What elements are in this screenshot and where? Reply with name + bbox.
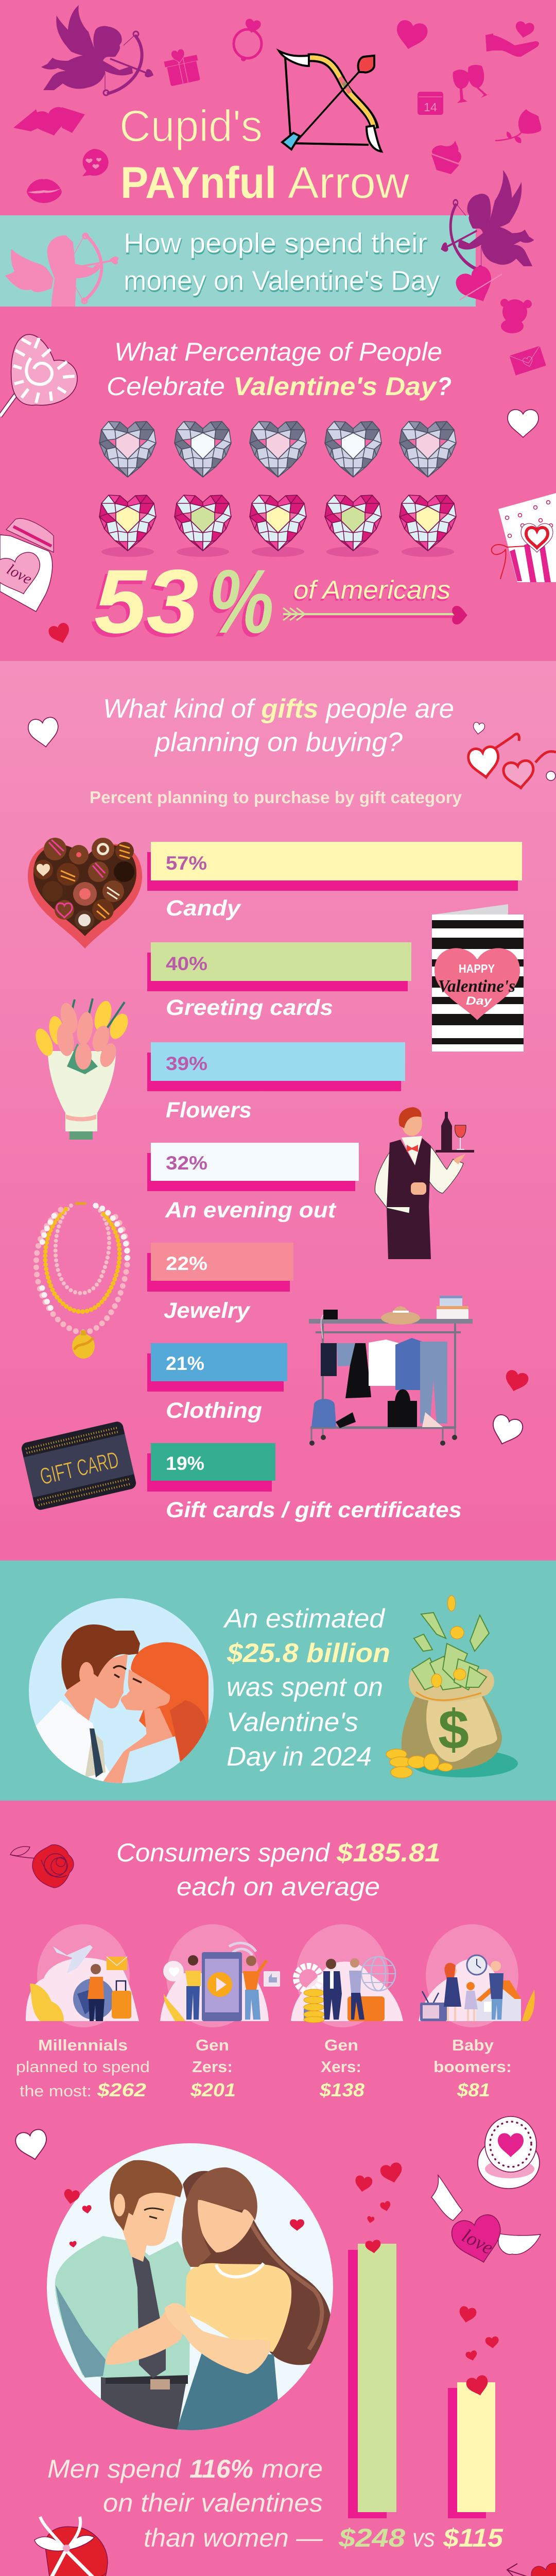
label: Gen Zers — [190, 2036, 236, 2100]
icon: hand holding heart — [485, 21, 539, 57]
icon: heart — [393, 19, 429, 53]
icon: red heart — [502, 1369, 530, 1394]
icon: chocolate box — [28, 838, 142, 948]
gem heart pictogram, 5 gray of 10 — [99, 421, 456, 477]
heading: ? — [437, 372, 451, 401]
title: PAYnful — [120, 158, 276, 208]
illustration: money bag: $ — [438, 1698, 469, 1760]
bar: women — [448, 2388, 486, 2518]
label: of Americans: of Americans — [293, 575, 450, 604]
bar: Jewelry: Jewelry — [164, 1298, 251, 1323]
arrow — [283, 606, 467, 624]
illustration: kissing couple — [29, 1598, 214, 1798]
item: baby boomers — [419, 1924, 535, 2100]
icon: clothes rack — [309, 1296, 473, 1446]
panel: gift categories — [21, 694, 556, 1522]
text: estimated spend — [223, 1604, 390, 1772]
bar: Gift cards: Gift cards / gift certificates — [166, 1498, 462, 1522]
subtitle: money on Valentine's Day — [124, 265, 440, 296]
icon: love jar — [0, 518, 54, 612]
icon: winged heart — [13, 105, 85, 140]
bar: Jewelry — [147, 1243, 293, 1323]
heading — [103, 694, 454, 757]
icon: cupcake — [431, 141, 461, 174]
text: men spend more: $248 — [338, 2523, 405, 2552]
item: gen zers — [160, 1924, 280, 2100]
icon: waiter — [375, 1107, 474, 1259]
icon: greeting card: Day — [466, 994, 493, 1007]
bar: men — [348, 2250, 387, 2518]
icon: tulip bouquet — [32, 998, 132, 1140]
icon: speech bubble with hearts — [82, 149, 109, 176]
heading: What kind of gifts people are — [103, 694, 454, 724]
icon: calendar — [418, 92, 443, 115]
text: estimated spend: Day in 2024 — [227, 1742, 372, 1772]
bar: Gift cards — [147, 1443, 462, 1522]
label: Baby boomers: boomers: — [433, 2058, 512, 2076]
title — [119, 101, 410, 208]
text: men spend more: 116% — [189, 2454, 253, 2483]
panel: average spend by generation — [10, 1838, 535, 2100]
heading: planning on buying? — [154, 727, 403, 757]
icon: ring — [234, 18, 262, 61]
icon: rose — [495, 109, 541, 143]
heading: Celebrate — [107, 372, 225, 401]
bar: Greeting cards — [147, 942, 411, 1020]
bar: Clothing: 21% — [166, 1353, 204, 1374]
icon: gift card: GIFT CARD — [38, 1446, 121, 1490]
bar: Greeting cards: Greeting cards — [166, 995, 333, 1020]
item: millennials — [16, 1924, 150, 2100]
text: men spend more: Men spend — [47, 2454, 182, 2483]
illustration: business people — [291, 1924, 403, 2027]
icon: white heart — [488, 1413, 525, 1449]
label: Gen Xers — [319, 2036, 364, 2100]
panel: percentage who celebrate — [0, 334, 556, 652]
text: estimated spend: $25.8 billion — [227, 1638, 390, 1668]
text: men spend more: vs — [412, 2523, 435, 2552]
icon: purple cupid right — [440, 170, 534, 272]
icon: gift with heart — [492, 493, 556, 582]
heading: each on average — [177, 1872, 380, 1901]
label: Gen Xers: Xers: — [321, 2058, 361, 2076]
text: men spend more: on their valentines — [103, 2488, 323, 2517]
panel: total spent teal — [0, 1561, 556, 1801]
bar: Flowers: 39% — [166, 1053, 207, 1074]
icon: greeting card — [432, 904, 524, 1052]
subtitle: How people spend their — [124, 228, 427, 259]
label: Gen Zers: $201 — [190, 2079, 236, 2100]
heading: What Percentage of People — [114, 337, 442, 366]
heading: $185.81 — [336, 1838, 441, 1867]
bar: Candy: Candy — [166, 896, 241, 921]
icon: greeting card: Valentine's — [438, 977, 515, 996]
illustration: money bag — [386, 1596, 518, 1778]
title: Arrow — [288, 158, 410, 208]
icon: heart cake — [478, 2116, 540, 2189]
illustration: family — [419, 1924, 535, 2027]
icon: gift box — [162, 46, 202, 87]
label: Gen Zers: Zers: — [192, 2058, 233, 2076]
floating red hearts — [354, 2161, 499, 2398]
hearts on couple — [63, 2189, 304, 2248]
label: Gen Xers: Gen — [324, 2036, 358, 2054]
label: Baby boomers: $81 — [457, 2079, 490, 2100]
bar: Candy — [147, 842, 522, 921]
label: Millennials: the most: — [20, 2082, 92, 2100]
label: Baby boomers: Baby — [452, 2036, 494, 2054]
icon: winged love heart: love — [458, 2225, 497, 2259]
label: Millennials: $262 — [97, 2079, 146, 2100]
label: Baby boomers — [433, 2036, 512, 2100]
shadows under coloured gems — [101, 547, 454, 557]
bar: An evening out: 32% — [166, 1153, 207, 1174]
icon: bow and arrow — [279, 51, 381, 151]
icon: pink cupid in band — [5, 233, 119, 307]
stat: 53%: % — [209, 551, 274, 652]
icon: winged love heart — [431, 2175, 541, 2268]
icon: purple cupid left — [41, 5, 155, 95]
bar: Flowers: Flowers — [166, 1098, 252, 1123]
icon: champagne glasses — [453, 65, 490, 103]
illustration: phone users — [160, 1924, 280, 2027]
icon: red heart — [47, 621, 73, 646]
icon: small white heart — [472, 722, 485, 735]
chart subtitle: Percent planning to purchase by gift category — [90, 788, 462, 807]
title: Cupid's — [119, 101, 263, 151]
panel: gifts gradient background — [0, 661, 556, 1561]
illustration: couple holding hands — [47, 2143, 333, 2430]
bar: Clothing: Clothing — [166, 1398, 262, 1423]
icon: white heart — [508, 410, 538, 437]
icon: white heart — [14, 2128, 50, 2163]
heading — [116, 1838, 441, 1901]
stat: 53% — [94, 551, 274, 652]
icon: gift card — [21, 1420, 137, 1511]
bar: Greeting cards: 40% — [166, 953, 207, 974]
icon: teddy bear — [500, 299, 532, 333]
label: Millennials: Millennials — [38, 2036, 128, 2054]
bar: An evening out: An evening out — [165, 1198, 337, 1223]
text: men spend more — [47, 2454, 503, 2552]
icon: heart with arrow — [453, 263, 502, 309]
bar: Candy: 57% — [166, 853, 207, 874]
bar: women front — [457, 2382, 495, 2512]
header panel — [0, 5, 541, 333]
icon: red rose — [10, 1845, 74, 1888]
bar: An evening out — [147, 1143, 359, 1223]
label: Millennials: planned to spend — [16, 2058, 150, 2076]
icon: red gift heart box — [34, 2517, 108, 2576]
icon: envelope — [509, 346, 546, 376]
text: estimated spend: Valentine's — [227, 1707, 358, 1737]
text: estimated spend: was spent on — [227, 1672, 383, 1702]
icon: calendar: 14 — [424, 100, 437, 114]
item: gen xers — [291, 1924, 403, 2100]
bar: Flowers — [147, 1042, 405, 1123]
label: Millennials — [16, 2036, 150, 2100]
bar chart: spend men vs women — [348, 2161, 499, 2518]
heading — [107, 337, 451, 401]
icon: love jar: love — [4, 561, 35, 588]
icon: heart sunglasses — [467, 734, 556, 790]
heading: Consumers spend — [116, 1838, 331, 1867]
text: estimated spend: An estimated — [223, 1604, 386, 1634]
icon: white heart — [27, 716, 61, 749]
heading: Valentine's Day — [233, 372, 437, 401]
icon: lips — [27, 179, 62, 203]
subtitle — [124, 228, 440, 296]
icon: necklace — [36, 1204, 128, 1359]
stat: 53%: 53 — [94, 551, 199, 652]
bar: men front — [358, 2244, 396, 2512]
icon: greeting card: HAPPY — [459, 962, 495, 975]
text: men spend more: more — [262, 2454, 323, 2483]
bar: Gift cards: 19% — [166, 1453, 204, 1474]
bar: Clothing — [147, 1343, 287, 1423]
bar: Jewelry: 22% — [166, 1253, 207, 1274]
panel: men vs women spending — [14, 2116, 556, 2576]
text: men spend more: than women — — [144, 2523, 323, 2552]
bar chart — [147, 842, 522, 1522]
label: Gen Zers: Gen — [196, 2036, 229, 2054]
teal subtitle band — [0, 215, 476, 307]
text: men spend more: $115 — [443, 2523, 503, 2552]
illustration: traveller — [26, 1924, 139, 2027]
label: Gen Xers: $138 — [319, 2079, 364, 2100]
gem heart pictogram, 5 coloured of 10 — [99, 495, 456, 551]
icon: heart with arrow — [507, 2562, 556, 2576]
icon: lollipop — [0, 334, 77, 416]
